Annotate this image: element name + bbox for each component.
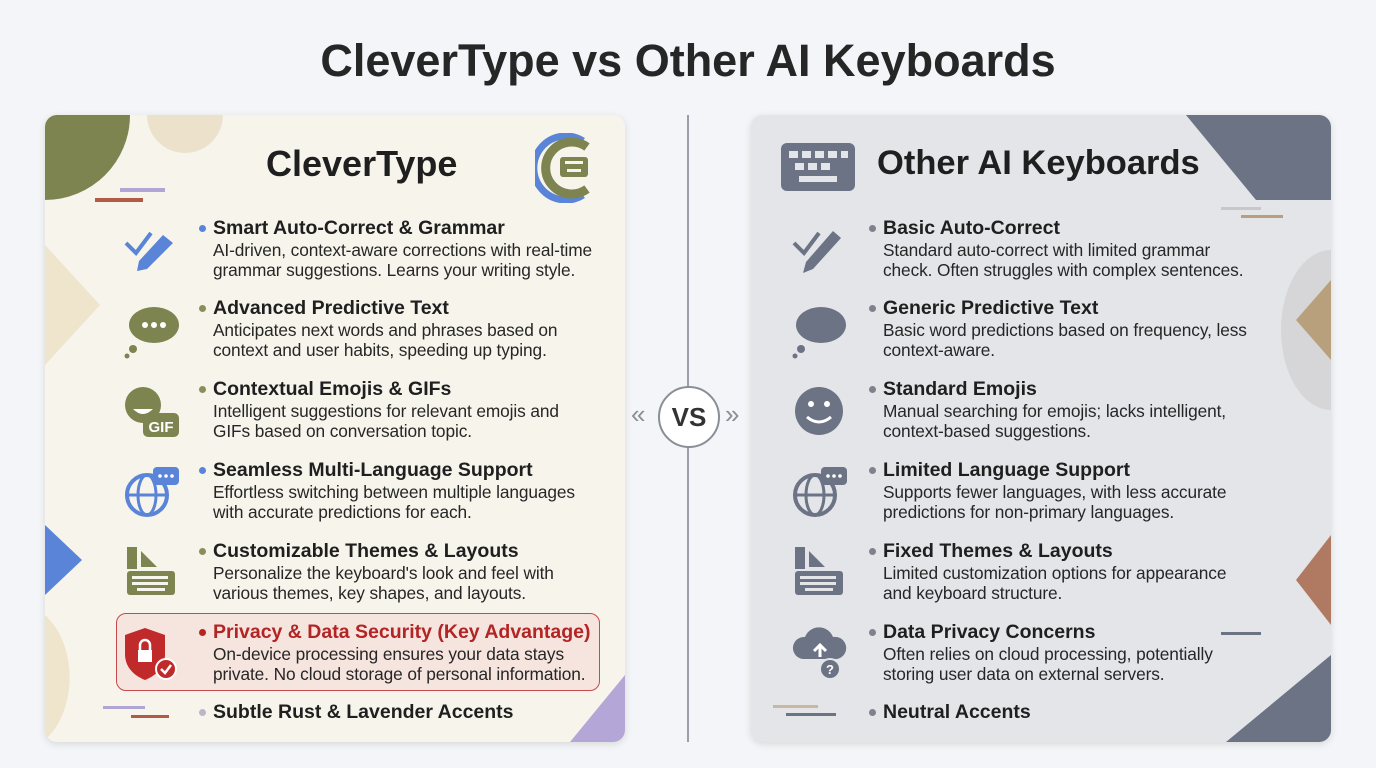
icon: CleverType logo	[535, 133, 590, 203]
item: data privacy concerns: Often relies on cloud processing, potentially	[883, 644, 1213, 664]
icon: themes keyboard grey	[795, 547, 843, 595]
item: data privacy concerns: Data Privacy Concerns	[883, 621, 1095, 643]
item: basic auto-correct: check. Often struggles with complex sentences.	[883, 260, 1243, 280]
item: languages: Effortless switching between multiple languages	[213, 482, 575, 502]
icon: cloud question: ?	[826, 662, 834, 677]
item: limited language: predictions for non-primary languages.	[883, 502, 1174, 522]
item: privacy: Privacy & Data Security (Key Advantage)	[213, 621, 591, 643]
item: limited language: Supports fewer languages, with less accurate	[883, 482, 1226, 502]
item: basic auto-correct	[869, 217, 1243, 280]
icon: cloud question	[792, 627, 846, 678]
item: emojis: Contextual Emojis & GIFs	[213, 378, 451, 400]
item: languages: with accurate predictions for each.	[213, 502, 472, 522]
item: limited language	[869, 459, 1226, 522]
item: fixed themes: and keyboard structure.	[883, 583, 1062, 603]
item: limited language: Limited Language Support	[883, 459, 1130, 481]
item: data privacy concerns	[869, 621, 1213, 684]
item: accents: Subtle Rust & Lavender Accents	[213, 701, 514, 723]
item: themes	[199, 540, 554, 603]
panel: Other AI Keyboards	[751, 115, 1331, 742]
item: fixed themes: Limited customization options for appearance	[883, 563, 1226, 583]
icon: globe grey	[793, 467, 847, 517]
item: themes: various themes, key shapes, and layouts.	[213, 583, 526, 603]
icon: emoji GIF: GIF	[148, 419, 174, 436]
item: generic predictive: Generic Predictive Text	[883, 297, 1098, 319]
icon: check pencil grey	[792, 231, 841, 273]
item: data privacy concerns: storing user data on external servers.	[883, 664, 1164, 684]
item: languages: Seamless Multi-Language Support	[213, 459, 533, 481]
item: generic predictive: Basic word predictions based on frequency, less	[883, 320, 1247, 340]
icon: shield lock	[125, 628, 177, 680]
item: fixed themes	[869, 540, 1226, 603]
item: generic predictive: context-aware.	[883, 340, 995, 360]
item: fixed themes: Fixed Themes & Layouts	[883, 540, 1113, 562]
heading: CleverType: CleverType	[266, 143, 457, 184]
panel: CleverType	[45, 115, 625, 742]
icon: globe	[125, 467, 179, 517]
item: emojis	[199, 378, 559, 441]
item: languages	[199, 459, 575, 522]
divider and VS badge: VS	[672, 402, 706, 432]
item: privacy: On-device processing ensures your data stays	[213, 644, 564, 664]
item: emojis: Intelligent suggestions for relevant emojis and	[213, 401, 559, 421]
item: themes: Personalize the keyboard's look and feel with	[213, 563, 554, 583]
item: basic auto-correct: Basic Auto-Correct	[883, 217, 1060, 239]
item: smart auto-correct: Smart Auto-Correct & Grammar	[213, 217, 505, 239]
icon: thought bubble	[124, 307, 179, 358]
callout: privacy key advantage	[116, 613, 600, 691]
item: emojis: GIFs based on conversation topic.	[213, 421, 472, 441]
item: themes: Customizable Themes & Layouts	[213, 540, 519, 562]
item: smart auto-correct: AI-driven, context-aware corrections with real-time	[213, 240, 592, 260]
icon: emoji GIF	[125, 387, 179, 437]
item: predictive text: context and user habits, speeding up typing.	[213, 340, 547, 360]
item: standard emojis: Manual searching for emojis; lacks intelligent,	[883, 401, 1226, 421]
item: standard emojis: Standard Emojis	[883, 378, 1037, 400]
icon: check pencil	[124, 232, 173, 271]
item: predictive text	[199, 297, 557, 360]
item: standard emojis: context-based suggestions.	[883, 421, 1091, 441]
icon: cloud bubble grey	[792, 307, 846, 358]
divider and VS badge: »	[725, 399, 739, 429]
heading: Other AI Keyboards: Other AI Keyboards	[877, 144, 1200, 182]
item: predictive text: Advanced Predictive Text	[213, 297, 449, 319]
item: privacy	[199, 621, 591, 684]
item: smart auto-correct	[199, 217, 592, 280]
item: privacy: private. No cloud storage of personal information.	[213, 664, 586, 684]
item: neutral accents: Neutral Accents	[883, 701, 1031, 723]
icon: keyboard header	[781, 143, 855, 191]
text: «	[631, 399, 645, 429]
item: predictive text: Anticipates next words and phrases based on	[213, 320, 557, 340]
divider and VS badge	[631, 115, 739, 742]
item: standard emojis	[869, 378, 1226, 441]
item: generic predictive	[869, 297, 1247, 360]
item: smart auto-correct: grammar suggestions. Learns your writing style.	[213, 260, 575, 280]
icon: themes keyboard	[127, 547, 175, 595]
icon: smiley	[795, 387, 843, 435]
item: basic auto-correct: Standard auto-correct with limited grammar	[883, 240, 1210, 260]
title: CleverType vs Other AI Keyboards	[320, 35, 1056, 86]
